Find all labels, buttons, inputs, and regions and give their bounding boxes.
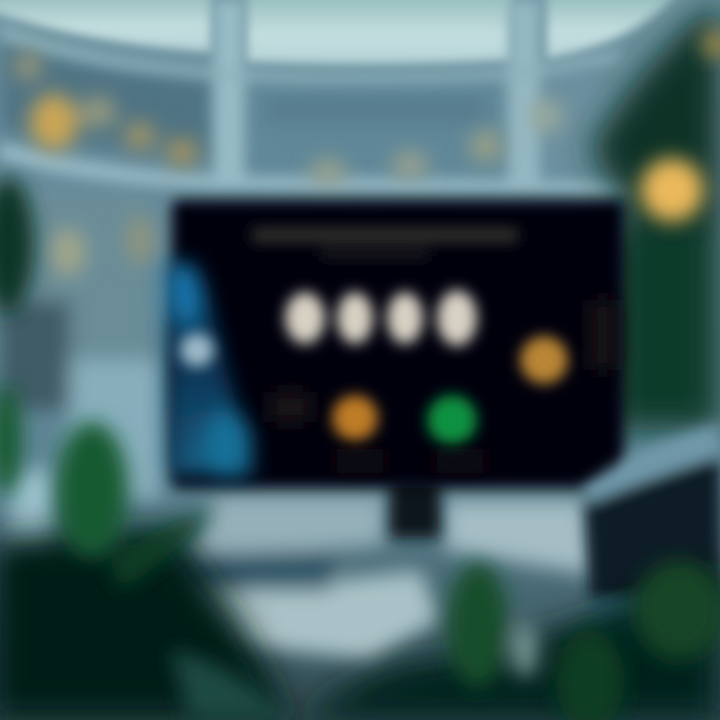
orange circle right	[520, 336, 568, 384]
glass roof panels	[0, 0, 680, 65]
monitor screen	[172, 200, 624, 488]
warm gallery lights	[14, 52, 562, 276]
orange circle lower	[332, 395, 378, 441]
right chair or device	[582, 424, 720, 640]
blue side panel	[166, 262, 255, 479]
row of four white circles	[285, 290, 477, 346]
monitor stand	[390, 480, 440, 538]
yellow orb light	[640, 30, 720, 222]
monitor	[166, 200, 624, 488]
foreground leaves left	[0, 385, 290, 720]
screen title text block, illegible	[252, 228, 518, 258]
foreground leaves right	[448, 560, 720, 720]
right side plants	[590, 0, 720, 430]
foreground plants bottom right	[300, 570, 720, 720]
faint caption blocks	[270, 300, 615, 467]
foreground plants bottom left	[0, 530, 290, 720]
structural beams	[0, 0, 640, 194]
left edge leaf	[0, 177, 34, 313]
green circle	[427, 395, 477, 445]
small white dot on blue panel	[180, 333, 214, 367]
upper gallery windows	[0, 40, 600, 560]
desk surface	[170, 495, 595, 660]
